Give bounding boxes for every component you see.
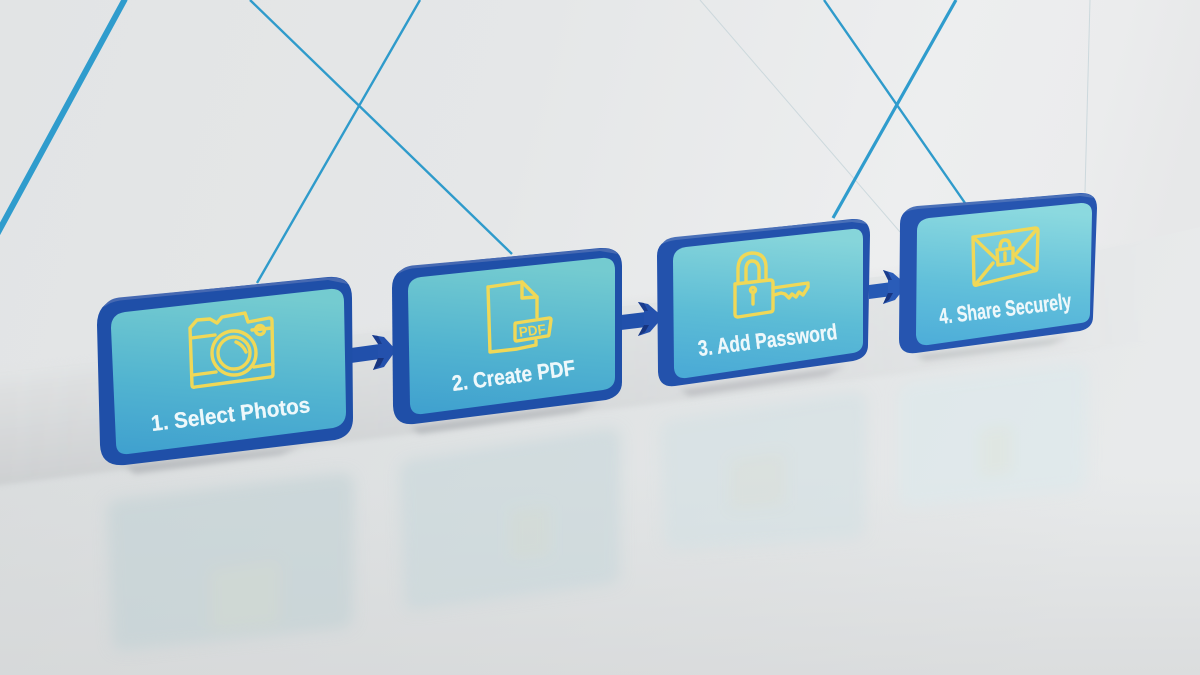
pdf tag text: PDF <box>518 321 547 340</box>
panel: step 2 create pdf <box>392 248 622 424</box>
card frame <box>899 193 1097 353</box>
reflected yellow icon glow <box>210 425 1012 632</box>
label: 2. Create PDF <box>450 355 577 396</box>
card face <box>673 229 863 378</box>
arrow: step 2 to 3 <box>621 302 663 336</box>
panel: step 3 add password <box>657 219 870 386</box>
reflection 1 <box>107 473 354 650</box>
card frame <box>392 248 622 424</box>
contact shadows <box>125 336 1070 474</box>
card frame <box>657 219 870 386</box>
faint wall lines <box>700 0 1090 232</box>
panel: step 4 share securely <box>899 193 1097 353</box>
background blue lines <box>0 0 1090 283</box>
arrow: step 3 to 4 <box>869 270 907 304</box>
icon: padlock with key <box>735 253 808 317</box>
card face <box>916 203 1092 345</box>
arrow: step 1 to 2 <box>351 335 396 370</box>
card face <box>408 258 615 414</box>
thin diagonal lines <box>250 0 965 283</box>
floor <box>0 227 1200 675</box>
card frame <box>97 277 353 465</box>
icon: pdf document <box>488 282 551 352</box>
floor reflections of the cards <box>107 363 1088 650</box>
icon: camera <box>190 313 273 387</box>
panel: step 1 select photos <box>97 277 353 465</box>
card face <box>111 289 346 454</box>
reflection 3 <box>660 392 867 550</box>
reflection 2 <box>399 428 621 610</box>
label: 1. Select Photos <box>150 392 311 436</box>
icon: envelope with lock <box>973 228 1038 285</box>
floor shadow band behind cards <box>0 370 684 484</box>
thick diagonal line <box>0 0 125 238</box>
label: 3. Add Password <box>697 319 839 361</box>
medium diagonal line <box>833 0 956 218</box>
label: 4. Share Securely <box>938 288 1073 329</box>
reflection 4 <box>899 363 1088 507</box>
